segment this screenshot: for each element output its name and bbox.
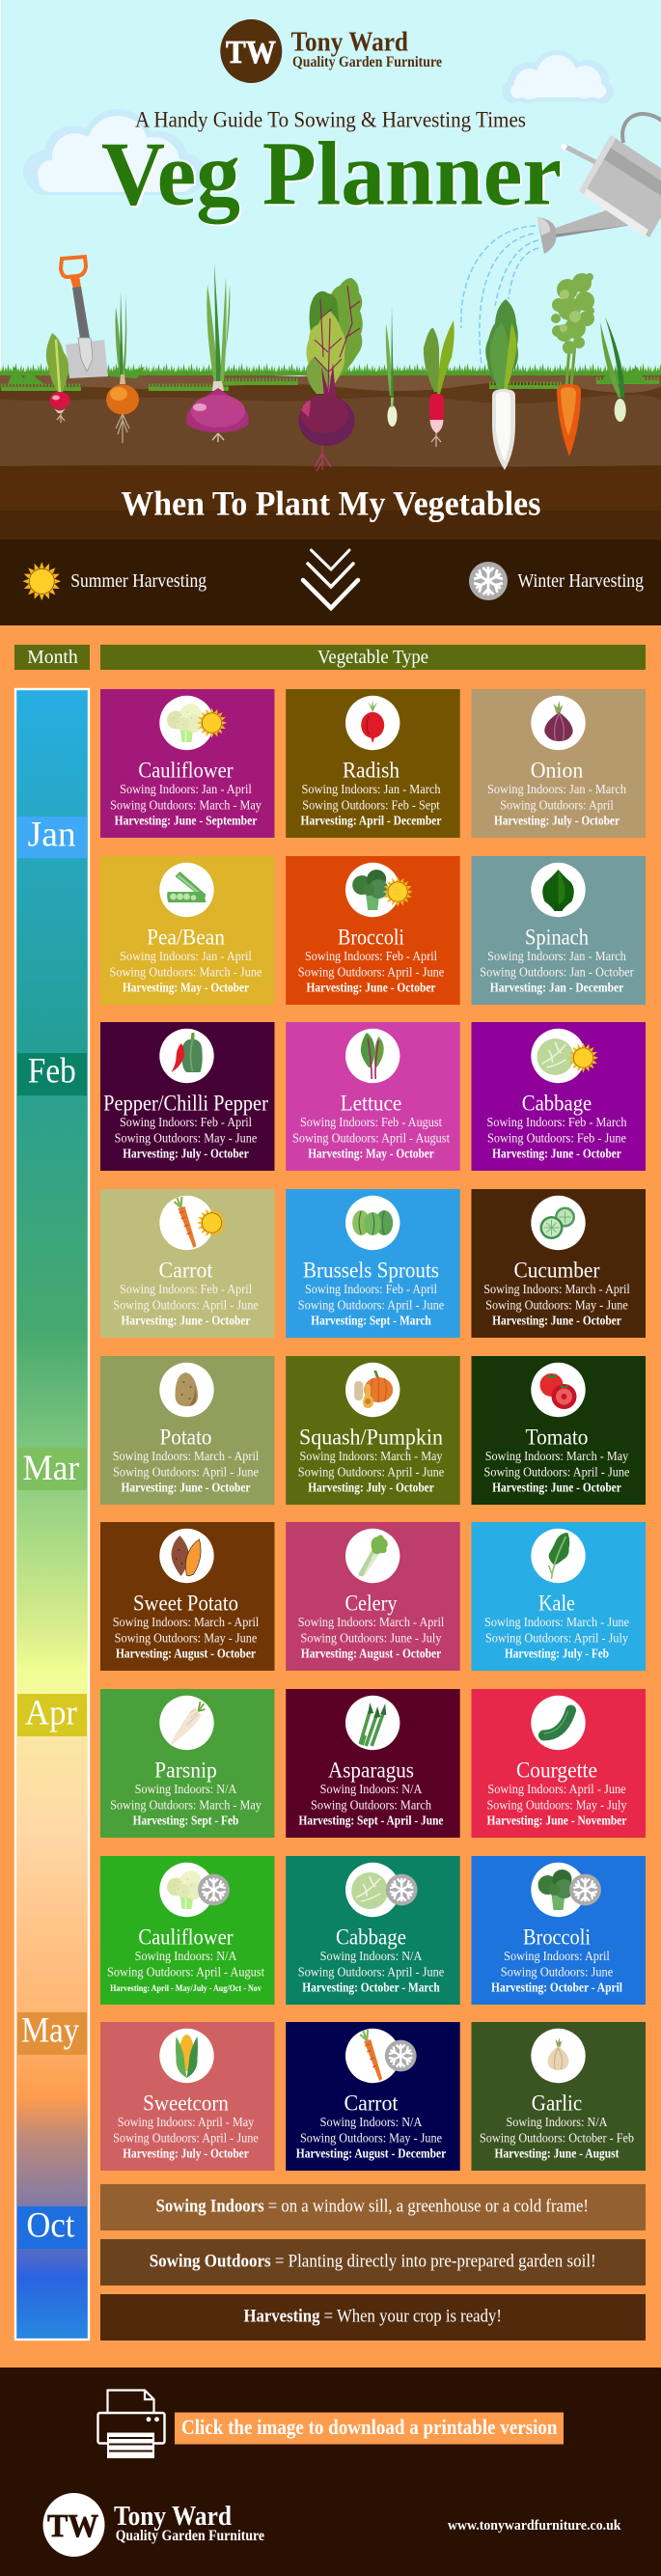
- dates: Sowing Indoors: N/A: [320, 1949, 423, 1963]
- name: Tomato: [525, 1425, 589, 1450]
- definition: sowing indoors: [100, 2184, 646, 2230]
- carrot plant: [551, 273, 594, 457]
- dates: Harvesting: June - October: [122, 1481, 251, 1494]
- dates: Harvesting: June - August: [494, 2147, 620, 2160]
- dates: Sowing Outdoors: April - August: [292, 1131, 450, 1145]
- card: Celery: [286, 1522, 460, 1671]
- dates: Harvesting: July - October: [308, 1481, 434, 1494]
- logo: footer: Quality Garden Furniture: [116, 2528, 264, 2544]
- month: May: May: [21, 2011, 79, 2051]
- dates: Sowing Indoors: N/A: [320, 2115, 423, 2129]
- dates: [110, 782, 262, 828]
- name: Broccoli: [523, 1925, 591, 1950]
- icon: cucumber slices: [531, 1196, 586, 1250]
- dates: Sowing Outdoors: May - June: [115, 1131, 257, 1145]
- dates: Sowing Outdoors: June - July: [301, 1631, 442, 1645]
- dates: [298, 1949, 444, 1994]
- green onion right: [600, 317, 626, 422]
- dates: Sowing Outdoors: April - June: [113, 1297, 259, 1313]
- card: Squash/Pumpkin: [286, 1356, 460, 1505]
- legend: winter harvesting: Winter Harvesting: [517, 571, 644, 592]
- daikon plant: [485, 299, 518, 470]
- month: Mar: Mar: [23, 1449, 79, 1488]
- dates: Harvesting: July - Feb: [505, 1647, 609, 1660]
- name: Carrot: [158, 1259, 213, 1282]
- dates: Sowing Indoors: Jan - March: [302, 782, 441, 796]
- name: Broccoli: [338, 925, 404, 950]
- name: Cucumber: [513, 1259, 600, 1282]
- icon: peppers: [159, 1029, 214, 1083]
- download button: Click the image to download a printable version: [181, 2415, 558, 2439]
- logo: Tony Ward: Quality Garden Furniture: [292, 54, 442, 70]
- dates: [480, 949, 634, 994]
- dates: Harvesting: April - May/July - Aug/Oct - Nov: [110, 1984, 262, 1994]
- dates: Sowing Indoors: March - April: [483, 1282, 630, 1296]
- dates: Harvesting: May - October: [308, 1147, 434, 1160]
- arrow: chevrons down: [303, 550, 358, 608]
- dates: Sowing Indoors: March - June: [484, 1615, 629, 1629]
- icon: courgette: [531, 1696, 586, 1750]
- icon: cauliflower with snowflake: [159, 1863, 230, 1917]
- dates: Sowing Outdoors: Jan - October: [480, 965, 634, 979]
- icon: parsnip: [159, 1696, 214, 1750]
- dates: Sowing Indoors: Feb - April: [305, 949, 437, 963]
- dates: Harvesting: October - April: [491, 1980, 622, 1994]
- icon: lettuce: [345, 1029, 399, 1083]
- section heading: When To Plant My Vegetables: [121, 484, 540, 522]
- dates: Sowing Indoors: March - April: [113, 1449, 260, 1463]
- cloud: right: [502, 50, 614, 103]
- dates: Sowing Indoors: March - April: [113, 1615, 260, 1629]
- dates: [483, 1282, 630, 1328]
- dates: [298, 949, 444, 994]
- dates: Harvesting: Sept - Feb: [133, 1813, 238, 1828]
- dates: Sowing Indoors: April - May: [118, 2115, 254, 2129]
- icon: printer: [98, 2390, 164, 2458]
- dates: [486, 1782, 627, 1828]
- dates: [292, 1115, 450, 1160]
- dates: Sowing Outdoors: April - June: [298, 1465, 444, 1479]
- cloud: left: [23, 109, 206, 195]
- icon: brussels sprouts: [345, 1196, 399, 1250]
- month: Oct: Oct: [26, 2205, 75, 2245]
- subtitle: A Handy Guide To Sowing & Harvesting Times: [135, 108, 526, 132]
- month: Feb: Feb: [28, 1052, 76, 1092]
- icon: onion: [531, 696, 586, 750]
- dates: [491, 1949, 622, 1994]
- dates: Sowing Outdoors: March - May: [110, 797, 262, 813]
- dates: Sowing Indoors: Feb - April: [305, 1282, 437, 1296]
- card: Cauliflower winter: [100, 1856, 274, 2005]
- dates: Harvesting: Sept - April - June: [299, 1813, 444, 1828]
- card: Brussels Sprouts: [286, 1189, 460, 1338]
- name: Spinach: [525, 925, 589, 950]
- column header: month: Month: [27, 647, 78, 668]
- column header: vegetable type: Vegetable Type: [317, 647, 428, 668]
- card: Cabbage summer: [471, 1022, 646, 1171]
- dates: Sowing Indoors: Jan - April: [120, 782, 252, 796]
- dates: [115, 1115, 257, 1160]
- dates: Harvesting: August - December: [296, 2147, 446, 2160]
- card: Spinach: [471, 856, 646, 1005]
- dates: [110, 1782, 262, 1828]
- card: Cabbage winter: [286, 1856, 460, 2005]
- icon: carrot with snowflake: [345, 2029, 417, 2083]
- icon: carrot with sun: [159, 1196, 227, 1250]
- dates: Sowing Indoors: N/A: [506, 2115, 608, 2129]
- name: Kale: [538, 1591, 575, 1616]
- dates: Sowing Outdoors: March - June: [110, 965, 262, 979]
- dates: Sowing Indoors: Jan - March: [487, 782, 626, 796]
- title: Veg Planner: [101, 125, 562, 225]
- month: Apr: Apr: [25, 1694, 77, 1733]
- dates: Harvesting: June - October: [492, 1481, 621, 1494]
- sky background: [0, 0, 661, 381]
- name: Carrot: [344, 2091, 399, 2116]
- dates: [487, 782, 626, 828]
- dates: Harvesting: June - October: [492, 1313, 621, 1328]
- radish plant: [46, 333, 69, 423]
- dates: Sowing Outdoors: Feb - Sept: [302, 797, 440, 813]
- dates: [107, 1949, 264, 1994]
- column header: month: [14, 645, 90, 670]
- month: Jan: [17, 816, 87, 858]
- dates: [480, 2115, 634, 2160]
- name: Cauliflower: [138, 1925, 234, 1950]
- icon: broccoli with sun: [345, 863, 413, 917]
- dates: Sowing Indoors: Feb - August: [300, 1115, 442, 1129]
- dates: Sowing Outdoors: May - June: [115, 1631, 257, 1645]
- spade: [61, 257, 108, 378]
- dates: Harvesting: Sept - March: [311, 1313, 431, 1328]
- watering can: [537, 114, 661, 254]
- icon: sweetcorn: [159, 2029, 214, 2083]
- dates: Sowing Indoors: Jan - March: [487, 949, 626, 963]
- dates: [113, 1449, 260, 1494]
- dates: Sowing Indoors: March - April: [298, 1615, 445, 1629]
- icon: cauliflower with sun: [159, 696, 227, 750]
- name: Celery: [345, 1591, 398, 1616]
- card: Pepper/Chilli Pepper: [100, 1022, 274, 1171]
- name: Parsnip: [154, 1759, 217, 1782]
- dates: Sowing Indoors: Feb - March: [486, 1115, 627, 1129]
- orange background: [0, 625, 661, 2368]
- card: Sweetcorn: [100, 2022, 274, 2171]
- card: Potato: [100, 1356, 274, 1505]
- dates: Sowing Outdoors: May - June: [300, 2131, 442, 2145]
- card: Kale: [471, 1522, 646, 1671]
- dates: Sowing Outdoors: April - June: [113, 1465, 259, 1479]
- dates: Sowing Indoors: April: [504, 1949, 610, 1963]
- soil layers: [0, 371, 661, 625]
- icon: celery: [345, 1529, 399, 1583]
- dates: [299, 1782, 444, 1828]
- name: Sweet Potato: [133, 1591, 238, 1616]
- name: Squash/Pumpkin: [299, 1425, 443, 1450]
- dates: Sowing Outdoors: April - August: [107, 1965, 264, 1979]
- dates: Harvesting: May - October: [123, 981, 249, 994]
- card: Radish: [286, 689, 460, 838]
- icon: cabbage with sun: [531, 1029, 598, 1083]
- name: Lettuce: [341, 1091, 401, 1116]
- dates: Harvesting: June - September: [115, 813, 257, 828]
- onion plant: [106, 291, 139, 443]
- icon: cabbage with snowflake: [345, 1863, 418, 1917]
- dates: [110, 949, 262, 994]
- long radish: [424, 320, 454, 447]
- icon: potato: [159, 1363, 214, 1417]
- dates: Harvesting: April - December: [301, 813, 442, 828]
- column header: vegetable type: [100, 645, 646, 670]
- dates: [301, 782, 442, 828]
- dates: [298, 1449, 444, 1494]
- dates: Harvesting: Jan - December: [490, 981, 623, 994]
- name: Pepper/Chilli Pepper: [103, 1091, 268, 1116]
- name: Asparagus: [328, 1759, 414, 1782]
- dates: Sowing Outdoors: June: [501, 1965, 613, 1979]
- dates: [113, 2115, 259, 2160]
- dates: Harvesting: June - October: [307, 981, 436, 994]
- card: Courgette: [471, 1689, 646, 1838]
- card: Cucumber: [471, 1189, 646, 1338]
- icon: sweet potatoes: [159, 1529, 214, 1583]
- dates: Sowing Outdoors: October - Feb: [480, 2131, 634, 2145]
- logo: footer: Tony Ward: [114, 2502, 232, 2532]
- dates: Sowing Indoors: N/A: [135, 1782, 237, 1796]
- name: Cauliflower: [138, 759, 234, 782]
- dates: Sowing Outdoors: April - June: [298, 965, 444, 979]
- dates: Sowing Indoors: April - June: [487, 1782, 626, 1796]
- dates: [296, 2115, 446, 2160]
- dates: Harvesting: July - October: [123, 1147, 249, 1160]
- red onion plant: [186, 263, 249, 442]
- download button: [175, 2413, 564, 2444]
- dates: [298, 1282, 444, 1328]
- dates: Sowing Outdoors: April - June: [298, 1965, 444, 1979]
- definition: sowing outdoors: Sowing Outdoors = Planting directly into pre-prepared garden soil!: [150, 2253, 596, 2272]
- dates: [298, 1615, 445, 1660]
- legend: summer harvesting: Summer Harvesting: [70, 571, 207, 592]
- logo: Tony Ward: TW: [226, 35, 276, 70]
- icon: spinach: [531, 863, 586, 917]
- dates: Sowing Outdoors: April - July: [485, 1631, 628, 1645]
- card: Pea/Bean: [100, 856, 274, 1005]
- dates: [113, 1615, 260, 1660]
- dates: [113, 1282, 259, 1328]
- definition: harvesting: [100, 2294, 646, 2341]
- icon: garlic: [531, 2029, 586, 2083]
- dates: Sowing Indoors: Feb - April: [120, 1115, 252, 1129]
- legend: summer harvesting: [22, 562, 207, 600]
- dates: Harvesting: August - October: [301, 1647, 441, 1660]
- dates: Sowing Indoors: Jan - April: [120, 949, 252, 963]
- dates: Harvesting: June - October: [492, 1147, 621, 1160]
- card: Onion: [471, 689, 646, 838]
- dates: Sowing Outdoors: March - May: [110, 1797, 262, 1813]
- definition: sowing indoors: Sowing Indoors = on a window sill, a greenhouse or a cold frame!: [156, 2198, 589, 2217]
- dates: Sowing Outdoors: April: [500, 797, 614, 813]
- card: Carrot winter: [286, 2022, 460, 2171]
- dates: Sowing Outdoors: April - June: [298, 1297, 444, 1313]
- dates: [484, 1615, 629, 1660]
- name: Cabbage: [522, 1091, 592, 1116]
- dates: Sowing Indoors: March - May: [300, 1449, 443, 1463]
- name: Potato: [160, 1425, 212, 1450]
- logo: footer: TW: [47, 2508, 98, 2544]
- card: Broccoli summer: [286, 856, 460, 1005]
- month: Oct: [17, 2205, 87, 2249]
- website: www.tonywardfurniture.co.uk: [448, 2518, 621, 2534]
- name: Radish: [343, 759, 399, 782]
- icon: asparagus: [345, 1696, 399, 1750]
- card: Asparagus: [286, 1689, 460, 1838]
- dates: Sowing Outdoors: April - June: [113, 2131, 259, 2145]
- name: Courgette: [516, 1759, 597, 1782]
- icon: tomatoes: [531, 1363, 586, 1417]
- dates: Sowing Indoors: March - May: [485, 1449, 628, 1463]
- dates: Harvesting: July - October: [123, 2147, 249, 2160]
- card: Broccoli winter: [471, 1856, 646, 2005]
- icon: pumpkin and squash: [345, 1363, 399, 1417]
- name: Pea/Bean: [147, 925, 225, 950]
- card: Garlic: [471, 2022, 646, 2171]
- spring onion: [386, 306, 398, 427]
- dates: Sowing Indoors: N/A: [320, 1782, 423, 1796]
- definition: harvesting: Harvesting = When your crop is ready!: [243, 2308, 502, 2327]
- dates: Sowing Outdoors: May - July: [486, 1797, 627, 1813]
- footer background: [0, 2368, 661, 2576]
- legend: winter harvesting: [469, 562, 644, 600]
- icon: pea pod: [159, 863, 214, 917]
- card: Parsnip: [100, 1689, 274, 1838]
- name: Sweetcorn: [143, 2091, 229, 2116]
- logo: Tony Ward: [220, 19, 442, 83]
- card: Cauliflower summer: [100, 689, 274, 838]
- dates: Sowing Outdoors: March: [311, 1797, 431, 1813]
- dates: Sowing Outdoors: May - June: [485, 1297, 628, 1313]
- grass strip: [0, 362, 661, 375]
- name: Garlic: [532, 2091, 582, 2116]
- logo: Tony Ward: Tony Ward: [291, 27, 408, 57]
- definition: sowing outdoors: [100, 2239, 646, 2285]
- name: Brussels Sprouts: [303, 1259, 439, 1282]
- icon: broccoli with snowflake: [531, 1863, 601, 1917]
- dates: Harvesting: August - October: [116, 1647, 256, 1660]
- name: Cabbage: [336, 1925, 406, 1950]
- dates: Harvesting: June - October: [122, 1313, 251, 1328]
- name: Onion: [531, 759, 584, 782]
- beetroot plant: [299, 278, 363, 471]
- dates: Harvesting: October - March: [302, 1980, 440, 1994]
- month timeline: [15, 689, 89, 2340]
- dates: Sowing Indoors: N/A: [135, 1949, 237, 1963]
- card: Tomato: [471, 1356, 646, 1505]
- card: Carrot summer: [100, 1189, 274, 1338]
- dates: Sowing Outdoors: April - June: [484, 1465, 629, 1479]
- logo: footer: [42, 2493, 264, 2557]
- dates: [484, 1449, 629, 1494]
- card: Lettuce: [286, 1022, 460, 1171]
- month: Feb: [17, 1052, 87, 1095]
- dates: Harvesting: June - November: [486, 1813, 627, 1828]
- dates: Sowing Indoors: Feb - April: [120, 1282, 252, 1296]
- month: Jan: Jan: [28, 816, 76, 855]
- grass patches: [1, 365, 659, 391]
- icon: kale: [531, 1529, 586, 1583]
- icon: radish: [345, 696, 399, 750]
- water drops: [461, 226, 538, 365]
- dates: Sowing Outdoors: Feb - June: [487, 1131, 626, 1145]
- card: Sweet Potato: [100, 1522, 274, 1671]
- dates: Harvesting: July - October: [494, 813, 620, 828]
- dates: [486, 1115, 627, 1160]
